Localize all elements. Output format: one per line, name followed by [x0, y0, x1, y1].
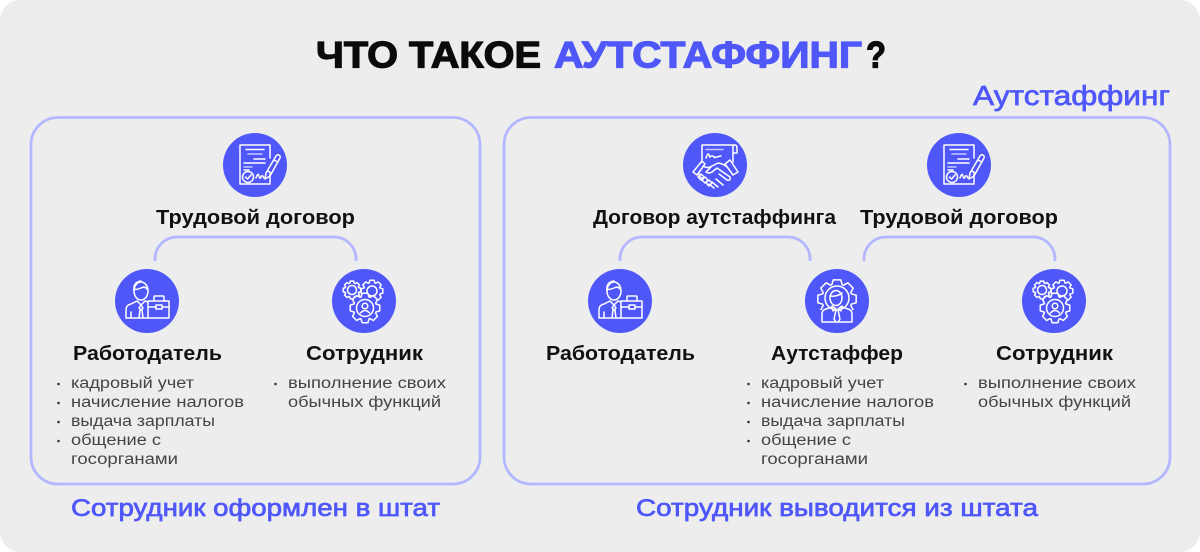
list: outstaffer duties: госорганами	[761, 451, 868, 468]
icon: employer	[115, 269, 179, 333]
panel: in-house staff	[31, 118, 480, 484]
heading: employment contract: Трудовой договор	[156, 206, 355, 229]
icon: employee	[1022, 269, 1086, 333]
list: outstaffer duties	[747, 375, 934, 468]
list: employer duties: госорганами	[71, 451, 178, 468]
list: employee duties	[964, 375, 1136, 411]
title	[316, 34, 886, 76]
icon: outstaffer	[805, 269, 869, 333]
title: АУТСТАФФИНГ	[554, 34, 862, 76]
icon: employment contract	[223, 133, 287, 197]
title: ЧТО ТАКОЕ	[316, 34, 541, 76]
connector: contract parties	[155, 237, 356, 261]
list: outstaffer duties: начисление налогов	[761, 394, 934, 411]
heading: employment contract: Трудовой договор	[860, 206, 1058, 229]
heading: employee: Сотрудник	[306, 342, 424, 365]
icon: employer	[588, 269, 652, 333]
icon: outstaffing agreement	[683, 133, 747, 197]
list: employer duties: общение с	[71, 432, 161, 449]
list: outstaffer duties: выдача зарплаты	[761, 413, 905, 430]
list: outstaffer duties: общение с	[761, 432, 851, 449]
list: employee duties: обычных функций	[978, 394, 1131, 411]
list: employee duties: выполнение своих	[978, 375, 1136, 392]
list: employer duties: начисление налогов	[71, 394, 244, 411]
heading: outstaffing agreement: Договор аутстаффинга	[593, 206, 837, 229]
list: employer duties	[57, 375, 244, 468]
list: employer duties: выдача зарплаты	[71, 413, 215, 430]
icon: employment contract	[927, 133, 991, 197]
title: ?	[866, 34, 886, 76]
list: employee duties	[274, 375, 446, 411]
caption: outstaffing: Сотрудник выводится из штата	[636, 495, 1038, 522]
label: outstaffing: Аутстаффинг	[973, 80, 1170, 111]
heading: employee: Сотрудник	[996, 342, 1114, 365]
panel: outstaffing	[504, 118, 1170, 484]
heading: employer: Работодатель	[73, 342, 222, 365]
heading: outstaffer: Аутстаффер	[771, 342, 903, 365]
connector: agreement parties	[620, 237, 810, 261]
caption: in-house staff: Сотрудник оформлен в штат	[71, 495, 440, 522]
icon: employee	[332, 269, 396, 333]
list: employee duties: обычных функций	[288, 394, 441, 411]
list: employer duties: кадровый учет	[71, 375, 194, 392]
heading: employer: Работодатель	[546, 342, 695, 365]
connector: contract parties	[864, 237, 1055, 261]
list: employee duties: выполнение своих	[288, 375, 446, 392]
list: outstaffer duties: кадровый учет	[761, 375, 884, 392]
